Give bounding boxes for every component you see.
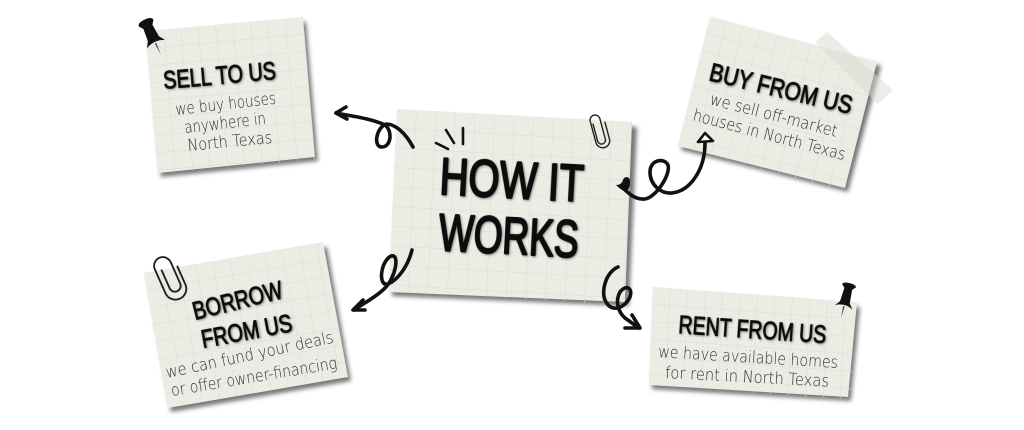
heading: how it works: HOW IT — [438, 148, 585, 214]
text: we can fund your deals or offer owner-financing: or offer owner-financing — [170, 353, 338, 400]
arrow: to borrow from us — [353, 250, 412, 310]
icon: paperclip — [151, 253, 190, 303]
panel: buy from us — [677, 17, 893, 192]
text: we buy houses anywhere in North Texas: we buy houses — [174, 89, 277, 119]
heading: how it works — [437, 148, 585, 269]
heading: sell to us: SELL TO US — [162, 57, 277, 95]
arrow: to rent from us — [604, 267, 640, 328]
text: we buy houses anywhere in North Texas: North Texas — [187, 128, 273, 155]
heading: buy from us: BUY FROM US — [707, 59, 855, 120]
icon: tape — [815, 32, 893, 104]
arrow: to buy from us — [616, 133, 713, 199]
icon: burst marks — [436, 128, 463, 149]
heading: borrow from us — [190, 276, 295, 354]
text: we can fund your deals or offer owner-financing: we can fund your deals — [164, 328, 335, 382]
heading: how it works: WORKS — [437, 204, 580, 269]
text: we sell off-market houses in North Texas: houses in North Texas — [691, 105, 848, 164]
icon: push pin — [135, 15, 170, 59]
panel: rent from us — [649, 281, 860, 401]
icon: push pin — [832, 281, 858, 320]
arrow: to sell to us — [336, 107, 413, 147]
text: we have available homes for rent in North Texas: we have available homes — [658, 342, 839, 372]
text: we sell off-market houses in North Texas: we sell off-market — [708, 89, 840, 141]
panel: borrow from us — [144, 242, 351, 412]
heading: rent from us: RENT FROM US — [678, 311, 827, 349]
text: we buy houses anywhere in North Texas — [174, 89, 277, 155]
icon: paperclip — [589, 113, 611, 149]
text: we buy houses anywhere in North Texas: anywhere in — [183, 109, 267, 137]
text: we have available homes for rent in North Texas — [658, 342, 839, 391]
text: we can fund your deals or offer owner-financing — [164, 328, 338, 400]
text: we sell off-market houses in North Texas — [691, 89, 848, 164]
heading: borrow from us: BORROW — [190, 276, 286, 326]
panel: sell to us — [135, 15, 318, 177]
heading: borrow from us: FROM US — [199, 310, 295, 354]
text: we have available homes for rent in North Texas: for rent in North Texas — [665, 363, 830, 391]
panel: how it works — [389, 109, 637, 306]
